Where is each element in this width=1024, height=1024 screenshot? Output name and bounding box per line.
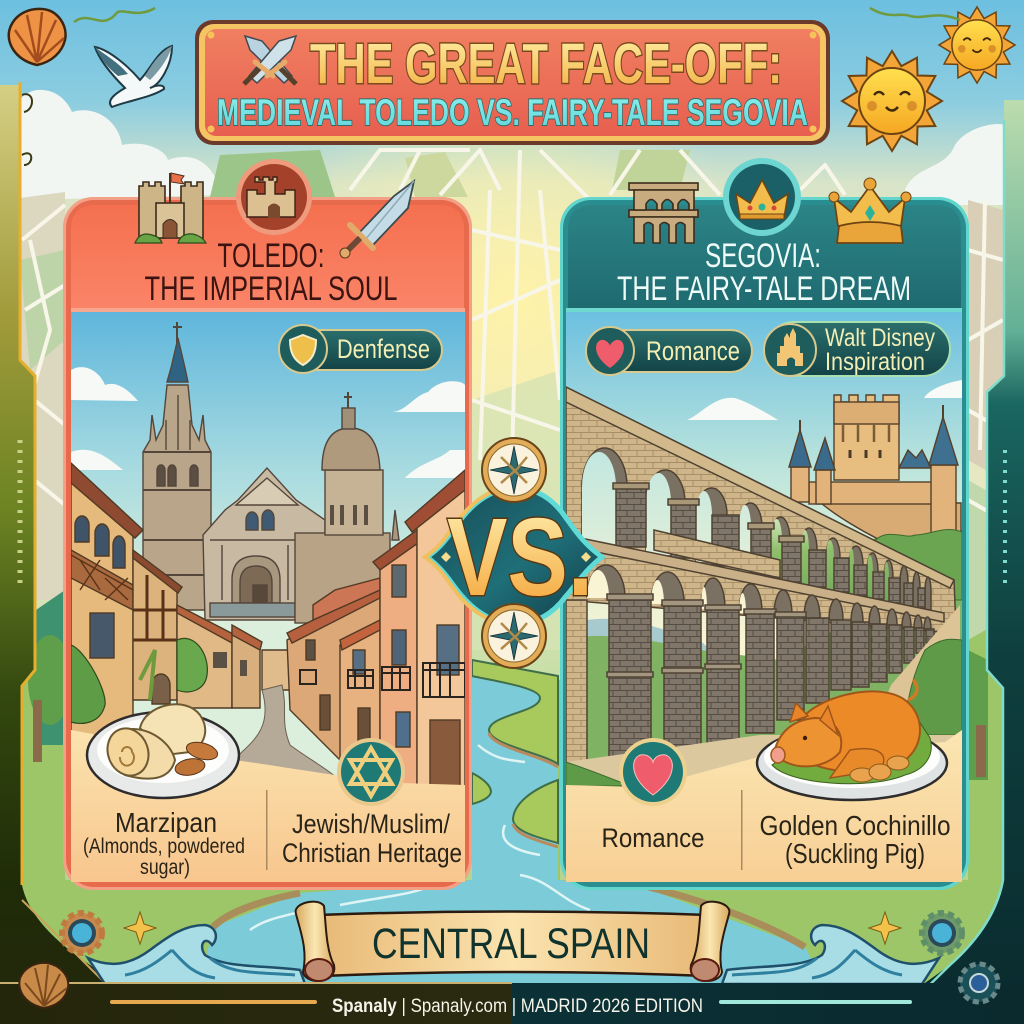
title line 2: MEDIEVAL TOLEDO VS. FAIRY-TALE SEGOVIA — [217, 92, 808, 133]
icon: castle with flag — [135, 173, 206, 243]
icon: golden crown — [829, 178, 911, 243]
text: heritage: Christian Heritage — [282, 838, 462, 868]
VS text: VS. — [447, 496, 593, 619]
Segovia illustration — [566, 312, 962, 882]
title line 1: THE GREAT FACE-OFF: — [310, 32, 782, 96]
icon: heart badge — [619, 738, 687, 806]
text: Golden Cochinillo — [760, 810, 950, 869]
pill: Defense: Denfense — [337, 334, 430, 364]
panel: title banner — [195, 20, 830, 145]
icon: sparkle right — [869, 912, 901, 944]
text: Marzipan ingredients: sugar) — [140, 856, 190, 879]
icon: waves right — [722, 925, 939, 984]
panel header: Toledo — [71, 205, 464, 310]
icon: gear bottom right — [960, 964, 998, 1002]
icon: Segovia medallion — [723, 158, 801, 236]
distant hills — [588, 618, 706, 651]
street trees — [71, 638, 207, 723]
panel: Toledo — [63, 197, 472, 890]
icon: marzipan plate — [87, 704, 239, 798]
icon: star of David badge — [337, 738, 405, 806]
decorative vine top right — [870, 8, 960, 20]
icon: seagull — [95, 46, 172, 107]
Alcazar castle — [789, 395, 961, 540]
margin trees — [28, 590, 988, 780]
bottom cream panel: Segovia — [566, 730, 962, 882]
aqueduct: lower arcade — [566, 565, 934, 763]
bottom cream panel: Toledo — [71, 730, 465, 882]
icon: gear right — [922, 913, 962, 953]
heading: Toledo: TOLEDO: — [218, 237, 324, 275]
text: Golden Cochinillo: (Suckling Pig) — [785, 838, 925, 869]
heading: Segovia: THE FAIRY-TALE DREAM — [617, 270, 911, 308]
street — [240, 684, 334, 775]
icon: compass top — [482, 438, 546, 502]
heading: Segovia: SEGOVIA: — [705, 237, 821, 275]
icon: compass bottom — [482, 604, 546, 668]
text: Marzipan ingredients: (Almonds, powdered — [83, 835, 245, 858]
aqueduct: cornice — [566, 535, 944, 622]
icon: Toledo medallion — [236, 159, 312, 235]
icon: small smiling sun — [939, 7, 1015, 83]
panel header: Segovia — [568, 205, 961, 310]
icon: aqueduct — [629, 183, 698, 243]
pill: Romance: Romance — [646, 336, 740, 366]
divider Segovia — [741, 790, 742, 870]
icon: crossed swords — [244, 36, 296, 84]
aqueduct: lower piers — [566, 597, 934, 763]
heading: Toledo: THE IMPERIAL SOUL — [144, 270, 398, 308]
background: city street map — [20, 150, 1003, 700]
scroll text: CENTRAL SPAIN — [372, 920, 650, 968]
pill: Walt Disney Inspiration: Inspiration — [825, 348, 925, 376]
Roman aqueduct — [566, 387, 956, 763]
icon: sparkle left — [124, 912, 156, 944]
cathedral dome — [295, 392, 399, 623]
icon: gear left — [62, 913, 102, 953]
bar trim — [0, 982, 512, 984]
background: central sun glow — [272, 40, 752, 560]
icon: scallop shell — [9, 9, 66, 65]
footer rule left — [110, 1000, 317, 1004]
cathedral tower — [143, 322, 211, 610]
text: Marzipan: Marzipan — [115, 807, 217, 838]
pill: Romance — [586, 327, 752, 375]
left houses — [71, 463, 290, 735]
frame: right teal border — [512, 100, 1024, 1024]
background: green land — [20, 600, 1003, 985]
Toledo illustration — [71, 312, 465, 882]
pill: Defense — [279, 325, 442, 373]
frame: left olive and gold border — [0, 82, 512, 1024]
divider Toledo — [266, 790, 268, 870]
text: Marzipan ingredients — [83, 835, 245, 879]
panel: Segovia — [560, 197, 969, 890]
aqueduct: upper arcade — [582, 448, 931, 610]
text: heritage — [282, 809, 462, 868]
background: clouds — [20, 90, 1004, 205]
icon: scallop shell bottom — [19, 963, 68, 1008]
right houses — [287, 470, 465, 800]
footer rule right — [719, 1000, 912, 1004]
icon: suckling pig plate — [757, 680, 947, 800]
icon: large smiling sun — [842, 51, 942, 151]
bottom bar background — [0, 983, 1024, 1024]
scroll banner — [296, 902, 729, 981]
icon: sword — [340, 181, 414, 258]
river — [200, 660, 825, 985]
decorative vine top left — [74, 8, 155, 22]
footer credits: Spanaly | Spanaly.com | MADRID 2026 EDITION — [332, 996, 703, 1017]
cathedral nave — [203, 468, 325, 620]
text: heritage: Jewish/Muslim/ — [292, 809, 450, 839]
heading: Segovia — [617, 237, 911, 308]
path and hillside — [885, 605, 960, 700]
pill: Walt Disney Inspiration: Walt Disney — [825, 324, 935, 352]
text: Romance: Romance — [602, 823, 704, 853]
heading: Toledo — [144, 237, 398, 308]
pill: Walt Disney Inspiration — [764, 322, 950, 376]
text: Golden Cochinillo: Golden Cochinillo — [760, 810, 950, 841]
icon: waves left — [88, 925, 305, 984]
aqueduct: stone body — [566, 387, 956, 632]
VS badge — [425, 438, 602, 668]
